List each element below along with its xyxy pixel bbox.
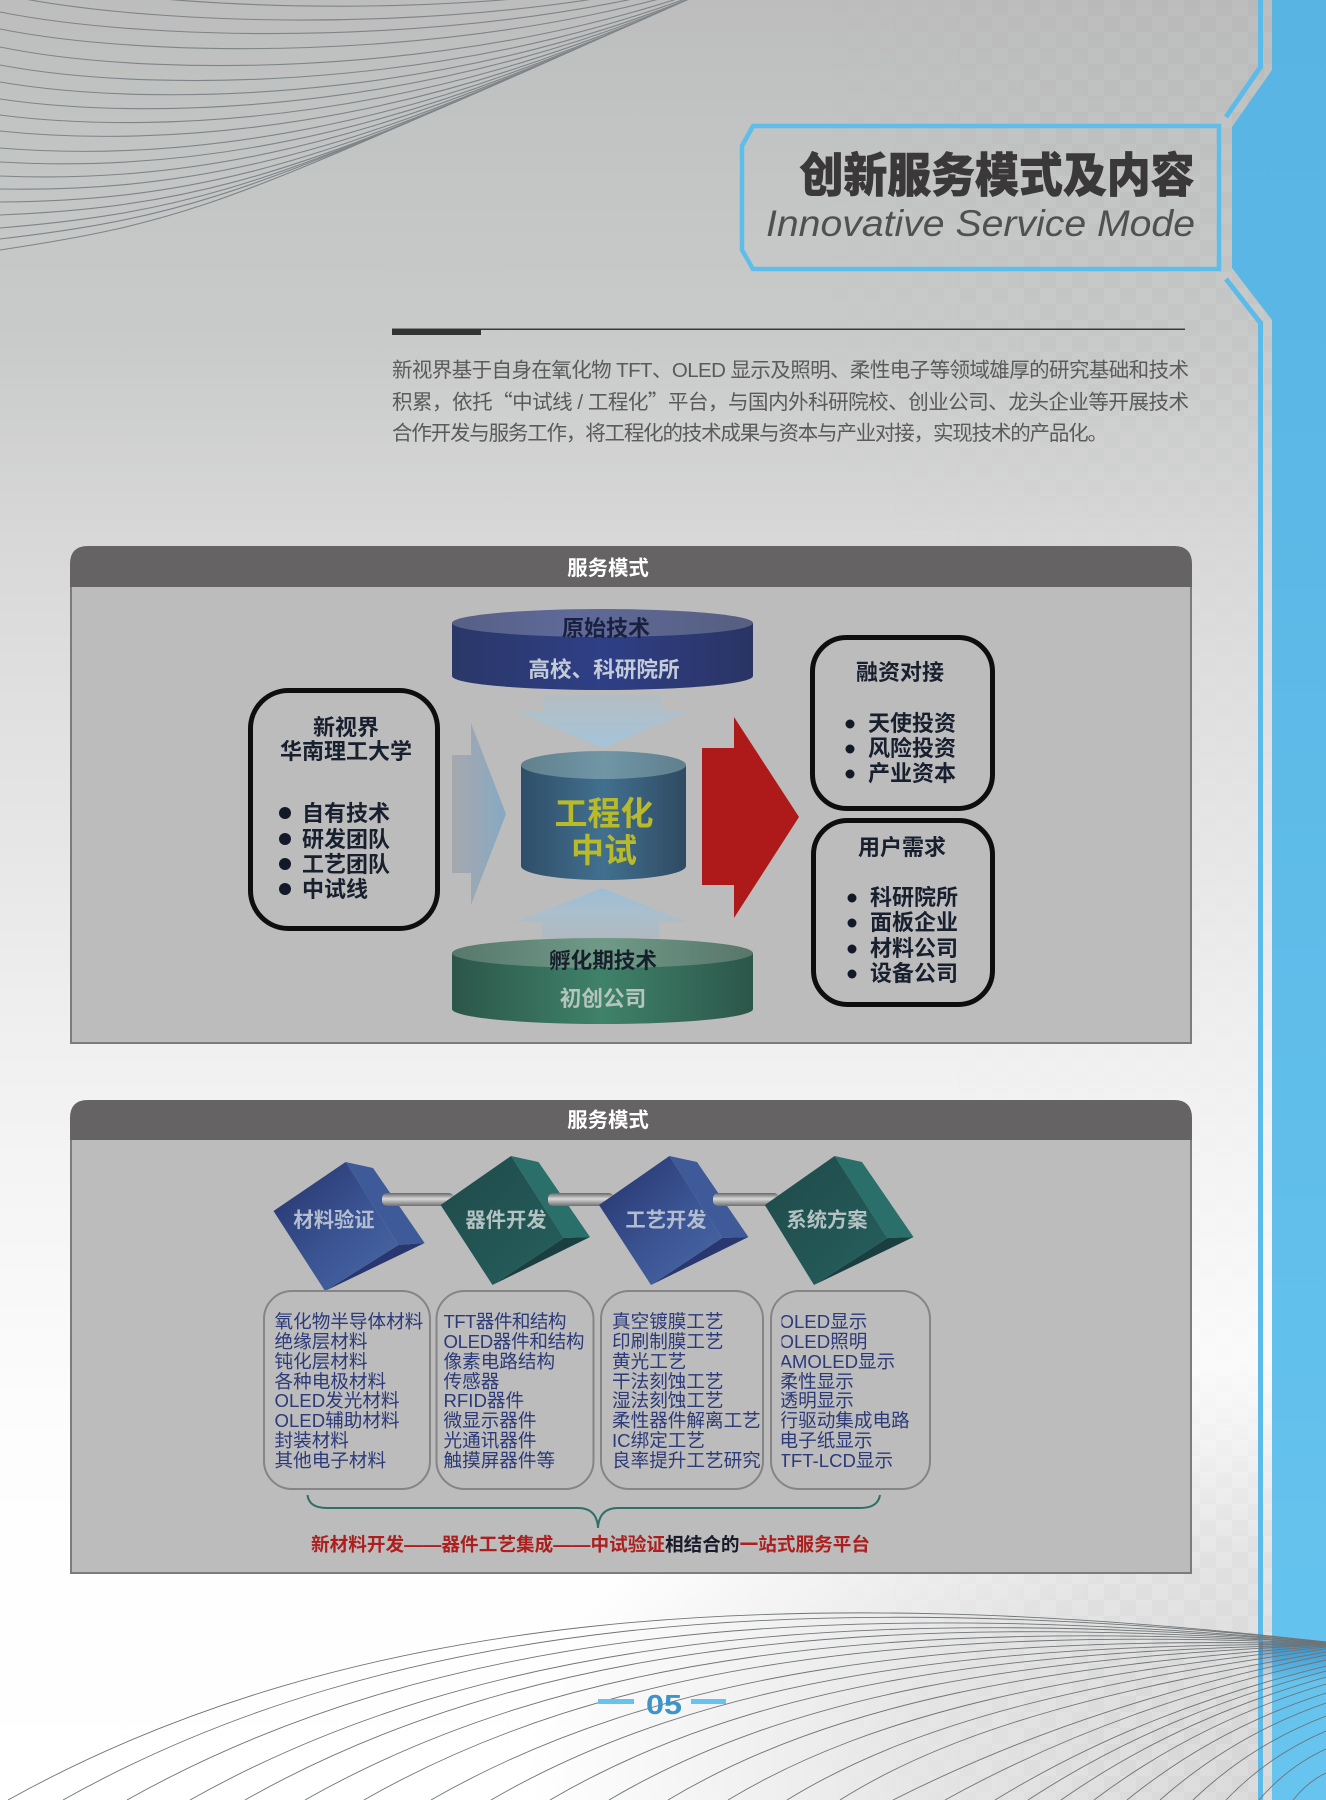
panel body (71, 1125, 1191, 1573)
right box: user demand (814, 820, 992, 1004)
one-stop platform caption: 新材料开发——器件工艺集成——中试验证相结合的一站式服务平台 (311, 1534, 870, 1555)
right box: user demand: 科研院所 (870, 885, 958, 910)
prism: material validation: 材料验证 (293, 1208, 375, 1232)
prism: system solutions (765, 1156, 914, 1285)
left box: 自有技术 (302, 801, 390, 826)
list box: systems: TFT-LCD显示 (780, 1450, 893, 1471)
intro paragraph (392, 359, 1189, 445)
list box: systems: 电子纸显示 (780, 1430, 872, 1451)
connector rod 2 (548, 1193, 614, 1206)
right box: user demand: 材料公司 (870, 936, 958, 961)
panel header (70, 1100, 1192, 1140)
intro paragraph: 合作开发与服务工作，将工程化的技术成果与资本与产业对接，实现技术的产品化。 (392, 422, 1108, 445)
heading rule (392, 328, 1185, 335)
panel: service mode diagram (70, 546, 1192, 1043)
brace (308, 1495, 880, 1528)
right box: user demand: 用户需求 (858, 835, 946, 860)
decorative curve lines: top left (0, 0, 886, 250)
list box: processes: 真空镀膜工艺 (612, 1311, 724, 1332)
prism: material validation (274, 1162, 425, 1291)
center cylinder: 中试 (571, 832, 637, 869)
list box: processes: 良率提升工艺研究 (612, 1450, 761, 1471)
list box: processes: 湿法刻蚀工艺 (612, 1390, 724, 1411)
arrow: down into center (518, 695, 687, 748)
list box: devices: 传感器 (444, 1371, 500, 1392)
page number (598, 1689, 726, 1720)
list box: materials (264, 1291, 430, 1489)
prism: device development (441, 1156, 590, 1285)
connector rod 3 (713, 1193, 779, 1206)
arrow: red output (702, 717, 799, 918)
center cylinder (521, 751, 686, 880)
subtitle: Innovative Service Mode (766, 203, 1195, 244)
list box: devices: OLED器件和结构 (444, 1331, 584, 1352)
list box: processes: 黄光工艺 (612, 1351, 686, 1372)
panel: service content (70, 1100, 1192, 1573)
panel body (71, 570, 1191, 1043)
list box: devices: 触摸屏器件等 (444, 1450, 555, 1471)
right box: financing (812, 638, 992, 808)
title box (742, 126, 1219, 269)
list box: processes: IC绑定工艺 (612, 1430, 705, 1451)
title: 创新服务模式及内容 (800, 149, 1194, 202)
panel header (70, 546, 1192, 587)
panel heading: 服务模式 (567, 557, 649, 580)
list box: devices: 光通讯器件 (444, 1430, 536, 1451)
list box: materials: 钝化层材料 (274, 1351, 367, 1372)
right box: user demand: 面板企业 (870, 910, 958, 935)
list box: materials: 氧化物半导体材料 (274, 1311, 423, 1332)
list box: materials: OLED发光材料 (274, 1390, 400, 1411)
left box: 华南理工大学 (280, 739, 412, 764)
list box: processes (601, 1291, 763, 1489)
left box: 新视界 (313, 715, 379, 740)
right box: financing: 产业资本 (868, 761, 956, 786)
list box: devices: RFID器件 (444, 1390, 524, 1411)
list box: materials: OLED辅助材料 (274, 1410, 400, 1431)
right box: financing: 天使投资 (868, 711, 956, 736)
bottom cylinder (452, 938, 753, 1024)
list box: systems: AMOLED显示 (780, 1351, 895, 1372)
list box: systems: OLED照明 (780, 1331, 867, 1352)
connector rod 1 (382, 1193, 454, 1206)
list box: devices: 微显示器件 (444, 1410, 536, 1431)
page number: 05 (646, 1689, 682, 1720)
decorative curve lines: bottom (8, 1613, 1326, 1800)
right box: financing: 融资对接 (856, 660, 944, 685)
prism: process development: 工艺开发 (625, 1209, 707, 1232)
list box: devices (436, 1291, 594, 1489)
list box: systems: 行驱动集成电路 (780, 1410, 910, 1431)
top cylinder: 原始技术 (562, 616, 650, 641)
list box: devices: TFT器件和结构 (444, 1311, 566, 1332)
thin blue side line (1226, 0, 1260, 1800)
arrow: up into center (516, 888, 687, 938)
top cylinder (452, 609, 753, 690)
right blue band (1232, 0, 1326, 1800)
list box: systems: 柔性显示 (780, 1371, 854, 1392)
prism: system solutions: 系统方案 (786, 1208, 868, 1232)
panel heading: 服务模式 (567, 1109, 649, 1132)
prism: process development (599, 1156, 748, 1285)
list box: processes: 干法刻蚀工艺 (612, 1371, 724, 1392)
list box: materials: 各种电极材料 (274, 1371, 386, 1392)
list box: materials: 绝缘层材料 (274, 1331, 367, 1352)
list box: systems: 透明显示 (780, 1390, 854, 1411)
list box: systems (771, 1291, 930, 1489)
intro paragraph: 新视界基于自身在氧化物 TFT、OLED 显示及照明、柔性电子等领域雄厚的研究基础和技术 (392, 359, 1189, 382)
bottom cylinder: 孵化期技术 (549, 948, 657, 973)
arrow: left input (452, 723, 506, 905)
list box: devices: 像素电路结构 (444, 1351, 555, 1372)
bottom cylinder: 初创公司 (560, 986, 646, 1011)
left box: 工艺团队 (302, 852, 390, 877)
left box: 中试线 (302, 877, 368, 902)
left box (250, 690, 438, 928)
list box: processes: 柔性器件解离工艺 (612, 1410, 761, 1431)
list box: processes: 印刷制膜工艺 (612, 1331, 724, 1352)
intro paragraph: 积累，依托“中试线 / 工程化”平台，与国内外科研院校、创业公司、龙头企业等开展技术 (392, 385, 1189, 415)
center cylinder: 工程化 (554, 795, 654, 832)
right box: financing: 风险投资 (868, 736, 956, 761)
left box: 研发团队 (302, 827, 390, 852)
top cylinder: 高校、科研院所 (528, 657, 680, 682)
list box: materials: 封装材料 (274, 1430, 349, 1451)
band mesh shading (1259, 1642, 1326, 1682)
list box: systems: OLED显示 (780, 1311, 867, 1332)
prism: device development: 器件开发 (465, 1209, 547, 1232)
right box: user demand: 设备公司 (870, 961, 958, 986)
list box: materials: 其他电子材料 (274, 1450, 386, 1471)
